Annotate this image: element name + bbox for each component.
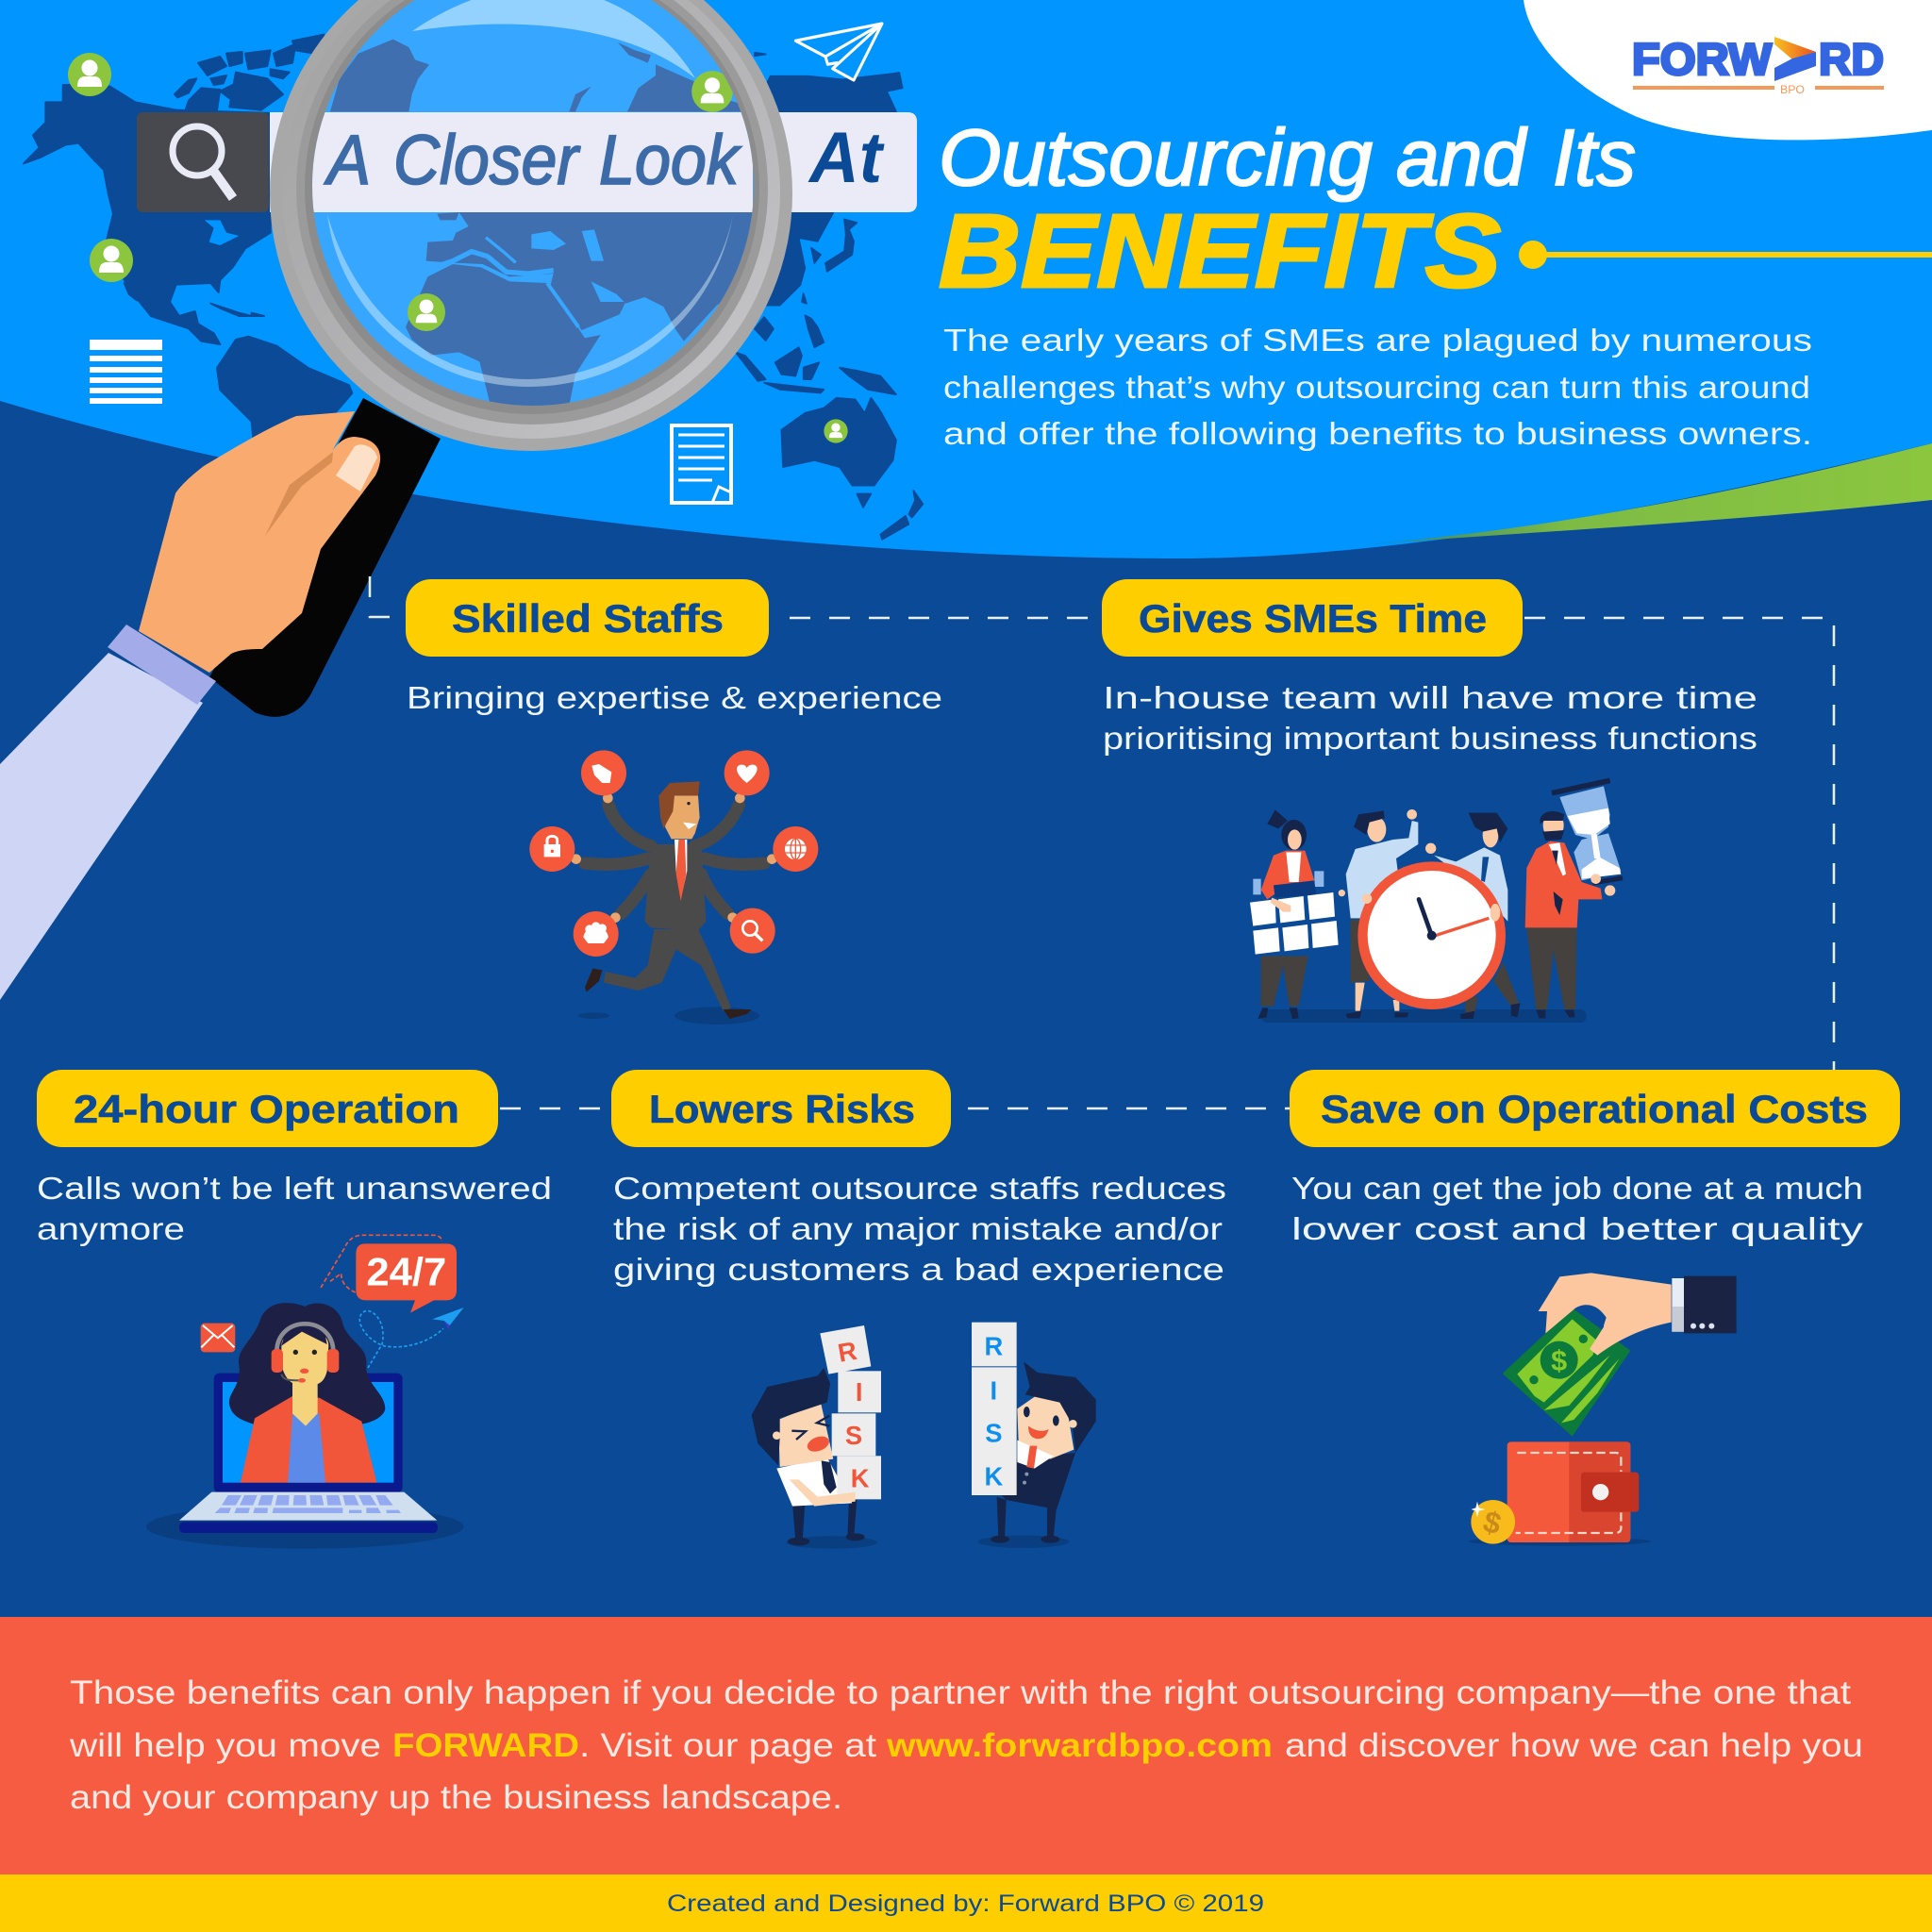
pill heading xyxy=(1290,1070,1900,1147)
description: anymore xyxy=(37,1211,185,1246)
benefit: Save on Operational Costs xyxy=(1290,1070,1900,1546)
intro paragraph: and offer the following benefits to business owners. xyxy=(943,416,1812,451)
description: Competent outsource staffs reduces xyxy=(613,1171,1226,1206)
pill heading: 24-hour Operation xyxy=(74,1087,459,1131)
closing call-to-action panel xyxy=(0,1617,1932,1874)
illustration: stacked risk blocks: R xyxy=(984,1332,1003,1361)
pin: Russia xyxy=(691,71,733,112)
search bar inside lens xyxy=(302,112,753,212)
dashed connector path xyxy=(370,576,1834,1108)
closing call-to-action panel: . Visit our page at xyxy=(579,1727,876,1764)
description xyxy=(613,1171,1226,1287)
logo: Forward BPO: RD xyxy=(1819,34,1884,84)
description: You can get the job done at a much xyxy=(1291,1171,1863,1206)
heading: A Closer Look: Closer xyxy=(393,121,581,199)
magnifying glass xyxy=(270,0,792,451)
search bar: dark icon box xyxy=(137,112,269,212)
illustration: support agent on laptop: 24/7 xyxy=(366,1250,446,1294)
pill heading xyxy=(611,1070,951,1147)
illustration: stacked risk blocks: S xyxy=(845,1421,862,1450)
pill heading: Gives SMEs Time xyxy=(1139,596,1487,641)
illustration: stacked risk blocks: I xyxy=(991,1375,997,1405)
closing call-to-action panel: www.forwardbpo.com xyxy=(886,1727,1273,1764)
description: the risk of any major mistake and/or xyxy=(613,1211,1223,1246)
pill heading: Lowers Risks xyxy=(649,1087,915,1131)
description xyxy=(1103,680,1757,756)
credit footer: Created and Designed by: Forward BPO © 2019 xyxy=(667,1890,1264,1917)
logo white corner shape xyxy=(1524,0,1932,140)
description xyxy=(37,1171,552,1246)
closing call-to-action panel: FORWARD xyxy=(392,1727,579,1764)
heading: A Closer Look: Look xyxy=(599,121,742,199)
illustration: team with clock and hourglass xyxy=(1250,780,1623,1023)
benefit: Lowers Risks xyxy=(611,1070,1226,1549)
intro paragraph xyxy=(943,323,1812,451)
pin: Africa xyxy=(408,293,445,331)
icon: text lines list xyxy=(90,340,162,404)
pin: Alaska xyxy=(68,53,111,96)
green crescent accent xyxy=(1368,443,1932,544)
logo: Forward BPO xyxy=(1632,34,1884,96)
heading underline with dot xyxy=(1519,241,1932,269)
description: Calls won’t be left unanswered xyxy=(37,1171,552,1206)
intro paragraph: challenges that’s why outsourcing can turn this around xyxy=(943,370,1810,405)
illustration: support agent on laptop xyxy=(146,1235,464,1549)
top lens glare xyxy=(412,0,695,78)
heading: A Closer Look: A xyxy=(324,121,371,199)
heading: Outsourcing and Its xyxy=(939,113,1636,202)
heading: Outsourcing and Its: Outsourcing xyxy=(939,113,1373,202)
intro paragraph: The early years of SMEs are plagued by numerous xyxy=(943,323,1812,358)
description xyxy=(1291,1171,1864,1246)
icon: paper plane xyxy=(795,24,882,80)
closing call-to-action panel: Those benefits can only happen if you decide to partner with the right outsourcing company—the one that xyxy=(70,1674,1851,1711)
illustration: multi-armed businessman xyxy=(529,750,818,1024)
lens rim xyxy=(270,0,792,451)
magnifier handle xyxy=(209,398,441,717)
description: In-house team will have more time xyxy=(1103,680,1757,715)
closing call-to-action panel: and discover how we can help you xyxy=(1285,1727,1863,1764)
benefit: Gives SMEs Time xyxy=(1102,579,1757,1023)
illustration: hand, cash and wallet xyxy=(1469,1273,1737,1546)
pill heading xyxy=(406,579,769,657)
pin: Australia xyxy=(824,419,848,443)
header bright blue wave xyxy=(0,0,1932,558)
closing call-to-action panel: will help you move xyxy=(69,1727,381,1764)
logo: Forward BPO: BPO xyxy=(1780,83,1805,96)
heading: BENEFITS: BENEFITS xyxy=(939,193,1501,309)
hand holding magnifier xyxy=(139,411,380,673)
credit footer xyxy=(0,1874,1932,1932)
illustration: hand, cash and wallet: $ xyxy=(1551,1345,1567,1377)
description: Bringing expertise & experience xyxy=(407,680,942,715)
heading: A Closer Look xyxy=(324,121,742,199)
description: lower cost and better quality xyxy=(1291,1211,1864,1246)
illustration: stacked risk blocks: K xyxy=(851,1464,870,1493)
sleeve xyxy=(0,653,203,1000)
illustration: stacked risk blocks: I xyxy=(856,1377,862,1407)
benefit: 24-hour Operation xyxy=(37,1070,552,1549)
heading: Outsourcing and Its: Its xyxy=(1553,113,1636,202)
pin: California xyxy=(90,239,133,282)
logo: Forward BPO: FORW xyxy=(1632,34,1773,84)
world map: Americas xyxy=(24,35,352,491)
illustration: stacked risk blocks xyxy=(752,1323,1096,1549)
illustration: stacked risk blocks: R xyxy=(836,1336,859,1368)
search bar: field with "At": At xyxy=(808,118,885,198)
pill heading xyxy=(37,1070,498,1147)
search bar: field with "At" xyxy=(270,112,917,212)
illustration: stacked risk blocks: K xyxy=(984,1461,1003,1491)
icon: document xyxy=(672,425,731,503)
illustration: stacked risk blocks: S xyxy=(985,1418,1002,1447)
description: prioritising important business functions xyxy=(1103,721,1757,756)
lens interior with enlarged map xyxy=(302,0,764,415)
pill heading xyxy=(1102,579,1523,657)
description: giving customers a bad experience xyxy=(613,1252,1224,1287)
cuff xyxy=(108,625,216,705)
closing call-to-action panel: and your company up the business landscape. xyxy=(70,1779,842,1816)
lower lens reflection xyxy=(327,214,733,387)
world map: Asia and Oceania xyxy=(733,53,923,540)
pill heading: Skilled Staffs xyxy=(452,596,724,641)
pill heading: Save on Operational Costs xyxy=(1321,1087,1868,1131)
benefit: Skilled Staffs xyxy=(406,579,942,1024)
heading: Outsourcing and Its: and xyxy=(1396,113,1527,202)
illustration: hand, cash and wallet: $ xyxy=(1480,1504,1505,1541)
